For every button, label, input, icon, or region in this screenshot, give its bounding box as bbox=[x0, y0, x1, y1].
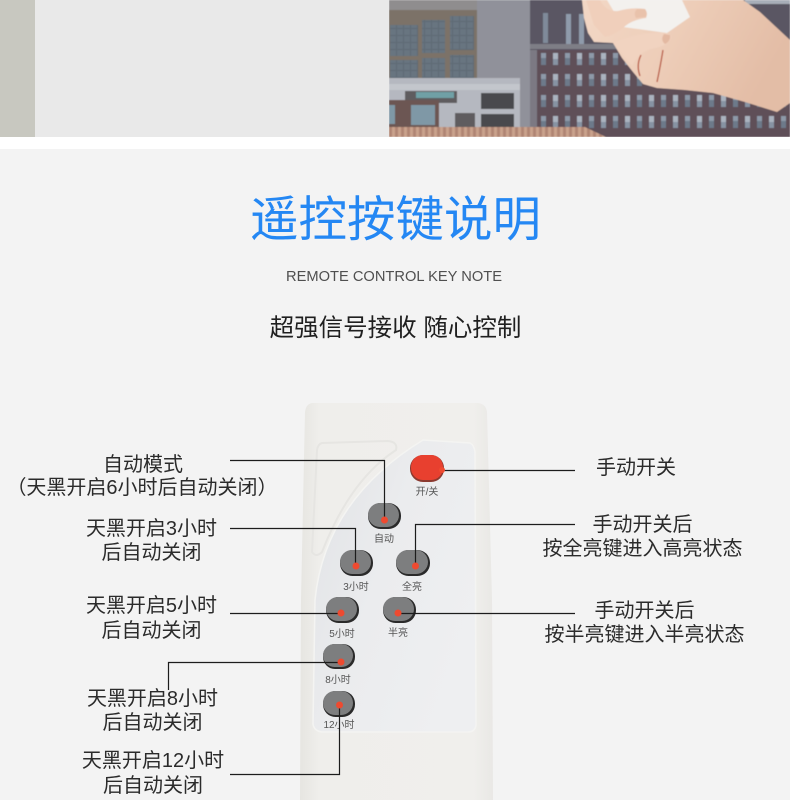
label: 12 hours bbox=[82, 749, 224, 797]
battery window outline bbox=[312, 441, 396, 555]
button: power: 开/关 bbox=[416, 485, 438, 498]
leader lines and dots bbox=[168, 460, 575, 774]
button: half brightness: 半亮 bbox=[388, 626, 408, 639]
label: full brightness: 按全亮键进入高亮状态 bbox=[542, 537, 742, 560]
button: auto: 自动 bbox=[374, 532, 394, 545]
label: 3 hours bbox=[86, 517, 217, 564]
label: auto mode: 自动模式 bbox=[103, 453, 183, 476]
button: 3 hours: 3小时 bbox=[343, 581, 369, 593]
top banner bbox=[0, 0, 790, 149]
label: auto mode bbox=[6, 453, 278, 499]
button: 8 hours: 8小时 bbox=[325, 674, 351, 686]
remote control bbox=[300, 403, 493, 800]
label: 5 hours: 天黑开启5小时 bbox=[86, 594, 217, 617]
photo: city buildings and hand bbox=[389, 0, 790, 137]
label: half brightness: 按半亮键进入半亮状态 bbox=[544, 623, 744, 646]
label: auto mode: （天黑开启6小时后自动关闭） bbox=[6, 476, 278, 499]
hand holding remote bbox=[582, 0, 790, 112]
label: 8 hours: 天黑开启8小时 bbox=[87, 687, 218, 710]
key panel bbox=[313, 440, 476, 732]
label: 8 hours bbox=[87, 687, 218, 734]
label: 5 hours: 后自动关闭 bbox=[102, 619, 202, 642]
button: 12 hours bbox=[323, 691, 355, 731]
label: half brightness bbox=[544, 599, 744, 646]
label: 12 hours: 后自动关闭 bbox=[103, 774, 203, 797]
label: full brightness bbox=[542, 513, 742, 560]
title: 遥控按键说明 bbox=[250, 193, 541, 247]
label: 3 hours: 天黑开启3小时 bbox=[86, 517, 217, 540]
label: half brightness: 手动开关后 bbox=[594, 599, 694, 622]
button: full brightness bbox=[396, 550, 430, 593]
button: 5 hours: 5小时 bbox=[329, 628, 355, 640]
label: 8 hours: 后自动关闭 bbox=[102, 711, 202, 734]
button: 3 hours bbox=[340, 550, 373, 593]
button: full brightness: 全亮 bbox=[402, 580, 422, 593]
label: full brightness: 手动开关后 bbox=[592, 513, 692, 536]
button: 12 hours: 12小时 bbox=[323, 719, 355, 731]
button: half brightness bbox=[383, 597, 416, 639]
remote body bbox=[300, 403, 493, 800]
button: auto bbox=[368, 503, 401, 545]
button: 5 hours bbox=[326, 597, 359, 640]
label: 3 hours: 后自动关闭 bbox=[102, 541, 202, 564]
button: 8 hours bbox=[323, 644, 355, 686]
label: 5 hours bbox=[86, 594, 217, 642]
label: 12 hours: 天黑开启12小时 bbox=[82, 749, 224, 772]
button: power bbox=[410, 455, 444, 498]
tagline: 超强信号接收 随心控制 bbox=[270, 314, 521, 342]
subtitle english: REMOTE CONTROL KEY NOTE bbox=[286, 269, 502, 285]
label: manual switch: 手动开关 bbox=[596, 456, 676, 479]
